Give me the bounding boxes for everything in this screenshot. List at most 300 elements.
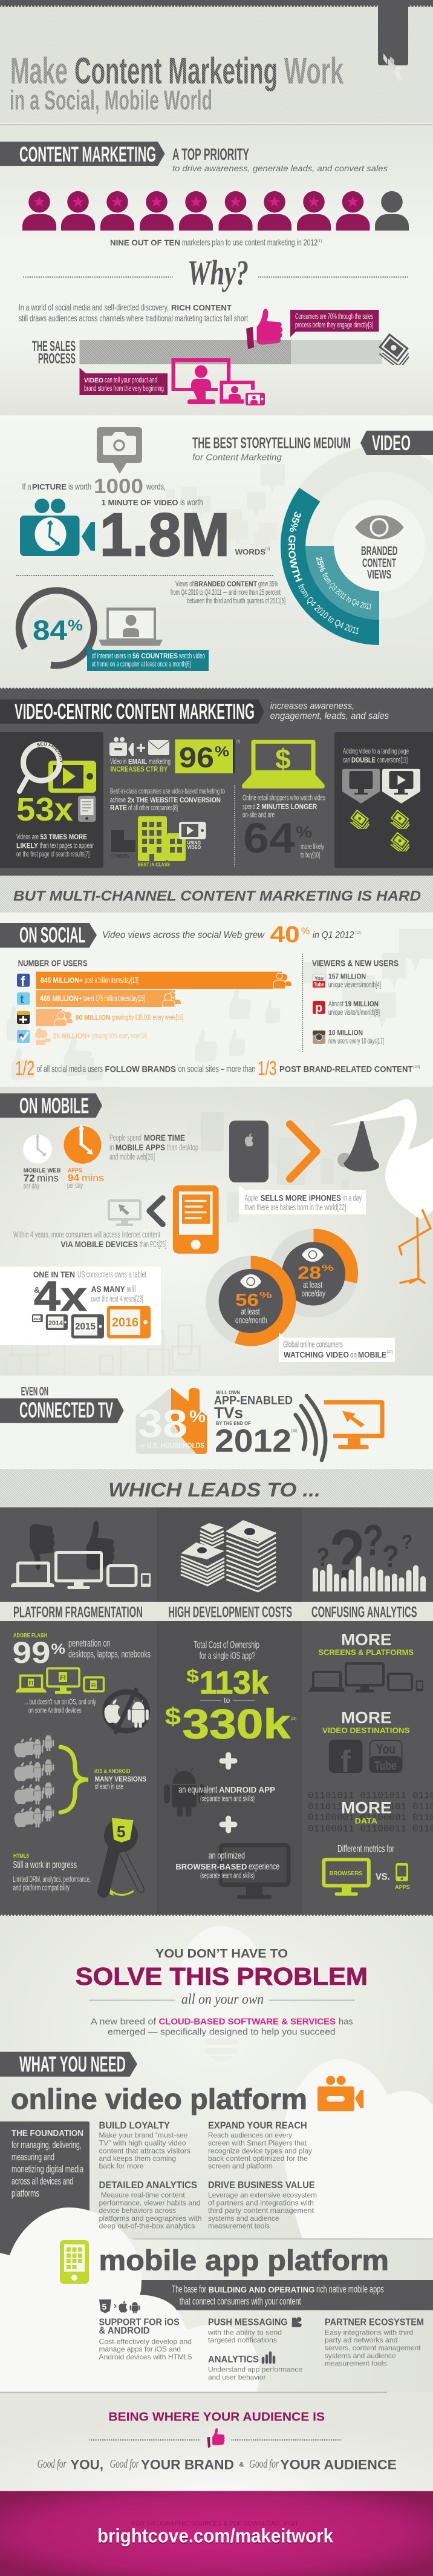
feature: expand your reach (208, 2121, 312, 2171)
text: app-enabled tvs 2012: 2012 (215, 1423, 291, 1459)
item: pinterest: unique visitors/month[9] (328, 1008, 380, 1017)
icon: shields with monitors (342, 769, 420, 804)
ribbon heading: content marketing (0, 142, 165, 166)
text: best-in-class: Best-in-class companies use video-based marketing to (110, 787, 225, 796)
sales process bar (32, 338, 382, 367)
icon: lime video device (48, 761, 96, 793)
chart: number of users: NUMBER OF USERS (18, 959, 88, 968)
feature: expand your reach: recognize device types and play (208, 2146, 312, 2155)
pale background icons (7, 929, 433, 1081)
text: follow brands and post content: on social sites – more than (178, 1064, 255, 1075)
feature: detailed analytics: Measure real-time content (101, 2191, 185, 2200)
text: 53 times more likely: than text pages to appear (40, 841, 94, 850)
text: minutes per day: 72 (24, 1173, 35, 1184)
feature: detailed analytics: deep out-of-the-box analytics (99, 2222, 195, 2230)
chart: branded content donut: from Q4 2010 to Q4 2011 (298, 583, 359, 634)
item: instagram: new users every 10 days[17] (328, 1037, 384, 1046)
text: html5 work in progress: HTML5 (13, 1853, 29, 1859)
icon: lime laptop: $ (275, 743, 291, 775)
stat: cost range: $ (165, 1703, 181, 1730)
text: people spend more time: MORE TIME (144, 1133, 185, 1142)
ribbon heading: what you need: WHAT YOU NEED (19, 2051, 126, 2076)
dark box: building and operating: that connect consumers with your content (180, 2295, 301, 2307)
icons: flash devices: Fl (60, 1674, 66, 1682)
more video destinations: Tube (374, 1759, 397, 1773)
panel: seo 53x (0, 732, 103, 868)
stat: 64%: 64 (243, 814, 295, 862)
feature: drive business value: systems and audience (208, 2214, 279, 2223)
feature: push messaging: PUSH MESSAGING (208, 2318, 288, 2328)
stat: flash 99%: penetration on (68, 1637, 111, 1649)
stat: 38% households house: U.S. HOUSEHOLDS (147, 1443, 204, 1450)
text: 53 times more likely (16, 832, 94, 859)
callout: watching video on mobile: [27] (387, 1351, 392, 1354)
bar: twitter (36, 990, 181, 1007)
callout: video stories (80, 368, 168, 395)
icon: signal waves (296, 1396, 325, 1460)
feature: build loyalty (99, 2121, 190, 2171)
feature: detailed analytics (99, 2180, 202, 2230)
chart: branded content donut: 35% GROWTH (288, 512, 302, 582)
label: branded content views: BRANDED (361, 545, 398, 558)
icon: camera plus email (109, 737, 169, 756)
item: youtube: You (314, 975, 324, 982)
heading: you don't have to solve this problem: all on your own (181, 1992, 264, 2008)
callout: apple sells more iphones: in a day (343, 1193, 362, 1203)
ribbon heading: what you need (0, 2051, 137, 2077)
text: cloud-based software: A new breed of (91, 2017, 157, 2027)
feature: support for ios and android: SUPPORT FOR iOS (99, 2318, 180, 2328)
panel: double conversions (334, 732, 433, 868)
bar: foursquare: growing 50% every year[18] (92, 1031, 147, 1040)
chart: 84% ring (19, 591, 94, 666)
subheading: increases awareness: engagement, leads, and sales (270, 711, 389, 721)
text: adding video: can (343, 755, 350, 764)
bar: facebook: 845 MILLION+ (41, 976, 83, 985)
icon: no ios android (105, 1688, 149, 1734)
feature: detailed analytics: performance, viewer habits and (99, 2198, 201, 2207)
heading: you don't have to solve this problem (76, 1947, 368, 2008)
text: doesn't run on ios: ... but doesn’t run on iOS, and only (24, 1697, 96, 1706)
icons: tablets by year (32, 1306, 151, 1339)
stat: 38% households house: 38 (138, 1401, 187, 1446)
item: pinterest: 19 MILLION (345, 1000, 379, 1008)
text: video views 40%: in Q1 2012 (313, 930, 354, 940)
more data (308, 1791, 433, 1835)
text: views of branded content: grew 35% (258, 579, 278, 588)
stat: 1.8M words: WORDS (235, 548, 265, 557)
sales process bar: THE SALES (32, 338, 76, 355)
divider with thumb icon (90, 2428, 342, 2448)
section: on mobile (0, 1086, 433, 1386)
text: follow brands and post content: 1/3 (258, 1057, 277, 1080)
chart: 28% donut: % (322, 1263, 334, 1273)
text: video in email (110, 757, 171, 773)
text: good for you, brand, audience (37, 2457, 397, 2473)
icon: video devices (172, 358, 265, 405)
stat: cost range (165, 1665, 296, 1748)
chart: 28% donut: at least (303, 1280, 323, 1290)
text: people spend more time: than desktop (167, 1142, 198, 1153)
text: a picture is worth 1000 words: PICTURE (32, 482, 67, 491)
feature: partner ecosystem: measurement tools (325, 2359, 387, 2367)
heading: even on connected tv: EVEN ON (21, 1385, 48, 1398)
icon: lime app phone (60, 2240, 89, 2284)
title: Content Marketing (74, 50, 278, 91)
feature: build loyalty: and keeps them coming (99, 2154, 176, 2163)
callout: video stories: can tell your product and (105, 376, 157, 384)
feature: expand your reach: Reach audiences on every (208, 2131, 292, 2140)
text: minutes per day: per day (24, 1182, 39, 1190)
column: development costs (164, 1639, 296, 1899)
stat: 1.8M words: 1.8M (100, 501, 230, 569)
text: app-enabled tvs 2012: APP-ENABLED (214, 1395, 293, 1408)
icon: html5 wrench (103, 1818, 141, 1896)
text: people spend more time: and mobile web[26] (109, 1152, 155, 1162)
heading: mobile app platform: mobile app platform (99, 2244, 389, 2276)
text: online retail shoppers: on-site and are (243, 810, 275, 819)
text: video in email: marketing (149, 757, 171, 766)
stat: 64% (243, 814, 324, 862)
callout: consumers are 70%: process before they engage directly[3] (295, 321, 373, 329)
text: within 4 years: than PCs[25] (140, 1239, 166, 1250)
text: people spend more time: in (109, 1142, 114, 1153)
text: online retail shoppers: 2 MINUTES LONGER (256, 804, 317, 811)
text: video in email: EMAIL (128, 759, 147, 766)
item: pinterest: p (315, 1001, 322, 1015)
pale cloud lower (0, 2207, 260, 2392)
text: views of branded content (171, 579, 285, 605)
text: online retail shoppers: Online retail shoppers who watch video (243, 793, 325, 802)
illustration: question marks and bars (313, 1515, 426, 1595)
header panel (0, 0, 433, 123)
pale speech bubbles (166, 464, 285, 554)
ribbon heading: content marketing: CONTENT MARKETING (19, 143, 156, 166)
text: 53 times more likely: 53 TIMES MORE (40, 834, 87, 841)
text: follow brands and post content: 1/2 (15, 1057, 34, 1080)
chart: 28% donut (269, 1228, 358, 1318)
callout: watching video on mobile: WATCHING VIDEO (284, 1349, 349, 1359)
icon: phone (78, 796, 96, 822)
text: html5 work in progress: Limited DRM, analytics, performance, (13, 1875, 91, 1884)
stat: 1.8M words: [4] (265, 548, 270, 551)
feature: expand your reach: screen and platform (208, 2162, 273, 2171)
chevron: less than (149, 1198, 163, 1224)
stat: flash 99%: % (51, 1641, 65, 1657)
subheading: a top priority (172, 145, 388, 173)
text: good for you, brand, audience: Good for (249, 2457, 279, 2471)
feature: push messaging (207, 2317, 302, 2344)
pale light bulb (181, 1926, 262, 2061)
callout: video stories: VIDEO (84, 377, 103, 384)
title: in a Social, Mobile World (10, 85, 212, 116)
stat: cost range: to (224, 1696, 230, 1705)
panel: the foundation: for managing, delivering, (11, 2139, 82, 2151)
chart: 56% donut (206, 1256, 296, 1346)
feature: drive business value: DRIVE BUSINESS VALUE (208, 2180, 315, 2191)
text: html5 work in progress: Still a work in progress (13, 1859, 77, 1870)
feature: expand your reach: back content optimized for the (208, 2154, 308, 2163)
icons: tablets by year: 2013 (34, 1317, 41, 1320)
feature: partner ecosystem: servers, content management (325, 2344, 421, 2352)
text: video views 40%: 40 (270, 922, 300, 948)
chart: 56% donut: once/month (235, 1316, 267, 1326)
text: best-in-class: RATE (110, 805, 127, 812)
chart: 84% ring: 84 (33, 615, 67, 646)
feature: push messaging: with the ability to send (207, 2328, 282, 2336)
browser experience: experience (249, 1861, 279, 1872)
more screens (308, 1630, 423, 1693)
url: brightcove.com/makeitwork (97, 2526, 333, 2548)
section: connected tv (0, 1375, 433, 1470)
section: video-centric content marketing (0, 687, 433, 876)
stat: 96% email ctr: % (215, 744, 229, 760)
stat: flash 99%: desktops, laptops, notebooks (68, 1648, 151, 1660)
icon: pale monitor (109, 1201, 140, 1226)
text: good for you, brand, audience: YOUR AUDIENCE (280, 2457, 397, 2473)
text: a picture is worth 1000 words: If a (22, 482, 31, 492)
ribbon heading: video-centric (0, 699, 264, 724)
different metrics: BROWSERS (330, 1870, 363, 1877)
icon: buildings: BEST IN CLASS (138, 862, 170, 868)
illustration: question marks and bars: ? (382, 1539, 399, 1575)
header band: three challenges: HIGH DEVELOPMENT COSTS (168, 1604, 292, 1621)
more video destinations: You (376, 1742, 396, 1757)
text: many versions: iOS & ANDROID (94, 1768, 131, 1775)
ribbon heading: on mobile: ON MOBILE (19, 1093, 89, 1118)
caption: nine out of ten (110, 238, 322, 248)
text: adding video (343, 747, 409, 764)
dark box: building and operating: The base for (172, 2283, 206, 2295)
item: youtube: Tube (314, 982, 324, 988)
text: one in ten: over the next 4 years[23] (91, 1294, 143, 1304)
heading: best storytelling medium: for Content Marketing (192, 453, 282, 463)
icon: orange monitor (324, 1403, 382, 1449)
illustration: stork (328, 1099, 433, 1283)
chart: branded content donut: 25% (316, 557, 325, 572)
text: minutes per day: 94 (68, 1172, 80, 1184)
text: video views 40% (102, 922, 361, 948)
item: instagram: 10 MILLION (328, 1029, 363, 1037)
text: views of branded content: from Q4 2010 to Q4 2011 — and more than 25 percent (171, 588, 281, 597)
icon: buildings (111, 816, 206, 868)
callout: video stories: brand stories from the very beginning (84, 384, 164, 393)
text: minutes per day: mins (37, 1173, 59, 1184)
icon: money (376, 335, 412, 369)
chart: number of users (17, 959, 291, 1045)
text: one in ten (33, 1270, 146, 1320)
list: viewers and new users (312, 959, 399, 1046)
more data: MORE (341, 1799, 392, 1817)
heading: being where your audience is: BEING WHERE YOUR AUDIENCE IS (108, 2411, 325, 2424)
icon: html5 wrench: 5 (117, 1823, 125, 1841)
why divider: Why? (187, 253, 249, 292)
text: follow brands and post content (15, 1057, 420, 1080)
icon: money stacks (349, 810, 411, 854)
feature: detailed analytics: platforms and geographies with (99, 2214, 202, 2223)
text: a picture is worth 1000 words: words, (146, 482, 166, 492)
text: 53 times more likely: LIKELY (16, 843, 38, 850)
stat: flash 99% (12, 1633, 151, 1670)
icon: lime laptop (242, 740, 325, 788)
stat: cost range: [29] (291, 1717, 296, 1721)
icons: tablets by year: 2014 (48, 1320, 63, 1327)
banner: multi-channel is hard: BUT MULTI-CHANNEL CONTENT MARKETING IS HARD (13, 888, 421, 905)
different metrics: VS. (376, 1872, 390, 1883)
bar: foursquare: 15 MILLION+ (53, 1032, 90, 1040)
text: views of branded content: between the third and fourth quarters of 2011[5] (187, 596, 285, 605)
more video destinations (322, 1708, 410, 1778)
feature: support for ios and android: Cost-effectively develop and (99, 2337, 192, 2345)
stat: 96% email ctr: 96 (179, 741, 214, 773)
icon: thumbs up (246, 309, 291, 349)
illustration: question marks and bars: ? (316, 1542, 330, 1572)
text: adding video: DOUBLE (351, 757, 376, 764)
brace (60, 1747, 88, 1812)
ribbon heading: on social: ON SOCIAL (19, 923, 86, 948)
feature: partner ecosystem: Easy integrations with third (325, 2328, 414, 2336)
dark box: building and operating: BUILDING AND OPERATING (209, 2285, 314, 2294)
column: platform fragmentation (12, 1633, 151, 1896)
text: rich content: In a world of social media and self-directed discovery, (19, 303, 169, 313)
text: a picture is worth 1000 words: 1000 (94, 475, 143, 498)
icon: clocks (23, 1124, 101, 1164)
feature: expand your reach: screen with Smart Players that (208, 2139, 307, 2148)
icon: buildings: VIDEO (187, 845, 201, 850)
text: many versions: MANY VERSIONS (95, 1775, 146, 1783)
text: good for you, brand, audience: Good for (37, 2457, 67, 2471)
bar: google plus: growing by 635,000 every week[16] (112, 1013, 183, 1022)
section: closing message (0, 2392, 433, 2491)
text: one in ten: US consumers owns a tablet (77, 1270, 146, 1280)
title: Work (284, 50, 343, 91)
subheading: increases awareness: increases awareness, (270, 701, 354, 712)
callout: 56 countries (87, 644, 209, 671)
bar: google plus (36, 1009, 183, 1026)
text: within 4 years (13, 1230, 166, 1250)
text: follow brands and post content: POST BRAND-RELATED CONTENT (279, 1064, 413, 1074)
text: within 4 years: Within 4 years, more consumers will access Internet content (13, 1230, 161, 1240)
illustration: money stacks (181, 1520, 276, 1591)
heading: best storytelling medium (192, 435, 351, 463)
caption: nine out of ten: marketers plan to use content marketing in 2012 (182, 238, 317, 248)
stat: 64%: % (296, 823, 312, 841)
callout: apple sells more iphones: Apple (245, 1193, 258, 1203)
browser experience: BROWSER-BASED (175, 1861, 247, 1871)
more data: DATA (355, 1816, 378, 1825)
bar: google plus: 90 MILLION (76, 1014, 111, 1022)
pale cloud upper (284, 2059, 433, 2239)
text: rich content (19, 303, 248, 324)
text: people spend more time: MOBILE APPS (116, 1142, 165, 1152)
text: app-enabled tvs 2012: [28] (291, 1429, 297, 1433)
icons: social networks (17, 974, 30, 1043)
section: mobile app platform (60, 2240, 433, 2382)
feature: build loyalty: BUILD LOYALTY (99, 2121, 171, 2131)
feature: partner ecosystem: party ad networks and (325, 2336, 398, 2344)
bar: twitter: 465 MILLION+ (40, 994, 82, 1003)
icon: video camera clock (20, 499, 95, 556)
text: one in ten: 4x (34, 1273, 87, 1320)
feature: support for ios and android: & ANDROID (99, 2326, 150, 2336)
caption: nine out of ten: NINE OUT OF TEN (110, 238, 180, 247)
column: confusing analytics (308, 1630, 433, 1896)
stat: 38% households house: % (189, 1407, 206, 1426)
ribbon heading: on mobile (0, 1093, 102, 1118)
callout: apple sells more iphones: than there are babies born in the world[22] (245, 1202, 347, 1213)
feature: build loyalty: Make your brand “must-see (99, 2131, 188, 2140)
section: content marketing priority (0, 123, 433, 416)
text: app-enabled tvs 2012: BY THE END OF (216, 1420, 251, 1426)
feature: analytics: ANALYTICS (208, 2355, 259, 2365)
text: total cost of ownership: for a single iOS app? (200, 1651, 255, 1662)
icons: flash devices (16, 1668, 104, 1694)
panel: the foundation: platforms (11, 2188, 39, 2199)
text: app-enabled tvs 2012: WILL OWN (216, 1389, 240, 1395)
stat: 64%: more likely (301, 842, 324, 851)
callout: 56 countries: 56 COUNTRIES (132, 653, 178, 660)
text: 53 times more likely: Videos are (16, 832, 39, 841)
heading: you don't have to solve this problem: YOU DON’T HAVE TO (155, 1947, 288, 1961)
callout: consumers are 70% (290, 310, 379, 337)
callout: consumers are 70%: Consumers are 70% through the sales (295, 312, 373, 321)
icon: orange tablet phone (173, 1185, 219, 1254)
section: challenges (0, 1507, 433, 1915)
feature: build loyalty: back for more (99, 2162, 144, 2171)
icon: eye (355, 516, 404, 539)
panel: the foundation: monetizing digital media (11, 2163, 83, 2175)
icons: tablets by year: 2015 (75, 1322, 96, 1332)
panel: the foundation (0, 2122, 90, 2263)
icons: html5 apple android: 5 (102, 2302, 106, 2312)
feature: drive business value (208, 2180, 317, 2230)
text: video views 40%: % (301, 925, 310, 937)
android app: (separate team and skills) (200, 1795, 255, 1803)
icon: plus (222, 1755, 235, 1767)
chart: branded content donut (281, 448, 433, 645)
feature: partner ecosystem: systems and audience (325, 2352, 396, 2360)
feature: push messaging: targeted notifications (208, 2336, 277, 2344)
chart: 56% donut: % (259, 1290, 272, 1300)
more screens: MORE (341, 1630, 392, 1648)
more video destinations: MORE (341, 1708, 392, 1726)
text: follow brands and post content: FOLLOW BRANDS (105, 1064, 176, 1074)
icon: iphone (229, 1121, 269, 1182)
android app: ANDROID APP (219, 1785, 275, 1795)
different metrics (324, 1844, 410, 1896)
item: youtube: unique viewers/month[4] (328, 980, 381, 989)
illustration: fragmented devices with thumbs (11, 1521, 151, 1589)
bar: foursquare (35, 1028, 147, 1045)
callout: watching video on mobile (279, 1332, 395, 1362)
label: branded content views (361, 545, 398, 582)
heading: you don't have to solve this problem: SOLVE THIS PROBLEM (76, 1962, 368, 1990)
banner: which leads to (0, 1469, 433, 1507)
browser experience: an optimized (209, 1851, 245, 1861)
label: branded content views: VIEWS (367, 568, 391, 582)
section: storytelling video (0, 415, 433, 689)
footer (0, 2491, 433, 2576)
feature: expand your reach: EXPAND YOUR REACH (208, 2121, 307, 2131)
feature: support for ios and android: manage apps for iOS and (99, 2345, 181, 2353)
subheading: a top priority: to drive awareness, generate leads, and convert sales (172, 163, 388, 173)
url: brightcove.com/makeitwork (97, 2525, 333, 2547)
text: cloud-based software: has (339, 2017, 353, 2027)
stat: 38% households house: OF (140, 1445, 146, 1449)
illustration: question marks and bars: ? (363, 1516, 383, 1565)
more video destinations: VIDEO DESTINATIONS (322, 1726, 410, 1735)
text: best-in-class: 2x THE WEBSITE CONVERSION (128, 797, 221, 804)
